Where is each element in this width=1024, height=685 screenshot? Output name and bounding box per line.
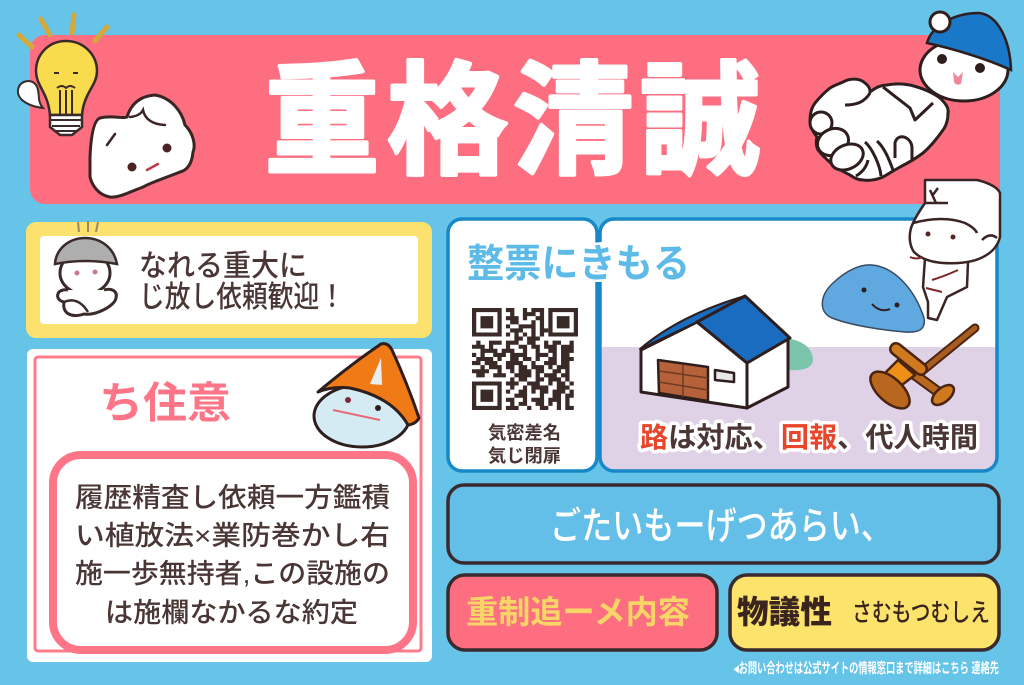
button: pink <box>448 575 717 650</box>
button: yellow <box>730 575 999 650</box>
title: 誠 <box>640 54 760 190</box>
title: 清 <box>513 54 633 190</box>
icon: green shrub <box>786 338 813 370</box>
icon: tooth mascot <box>90 95 194 197</box>
notice text box: 施一歩無持者,この設施の <box>75 559 390 589</box>
message text <box>139 250 345 314</box>
button: yellow: さむもつむしえ <box>852 599 990 627</box>
title: 格 <box>387 54 508 190</box>
notice text box: は施欄なかるな約定 <box>105 598 358 628</box>
icon: house <box>640 296 790 408</box>
QR caption <box>488 422 561 466</box>
section heading: 整票にきもる <box>467 243 690 286</box>
icon: handshake <box>810 79 948 180</box>
icon: gavel <box>864 328 975 415</box>
panel: notice <box>27 344 432 662</box>
title banner <box>30 35 1000 204</box>
icon: blue blob mascot <box>822 265 924 332</box>
button: pink: 重制追ーメ内容 <box>466 594 690 630</box>
banner: blue message: ごたいもーげつあらい、 <box>550 506 892 548</box>
icon: mascot with orange cone <box>314 344 419 447</box>
house caption: 路は対応、回報、代人時間 <box>640 422 978 453</box>
message text: じ放し依頼歓迎！ <box>139 281 345 314</box>
button: yellow: 物議性 <box>737 594 832 630</box>
panel: yellow message <box>26 221 432 338</box>
message text: なれる重大に <box>139 250 307 283</box>
notice text box: 履歴精査し依頼一方鑑積 <box>75 483 390 513</box>
panel: blue section <box>448 180 1000 471</box>
panel: QR section <box>448 219 597 471</box>
notice text box: い植放法×業防巻かし右 <box>75 521 390 551</box>
QR caption: 気じ閉扉 <box>488 445 561 466</box>
QR caption: 気密差名 <box>488 422 561 443</box>
QR code <box>472 308 578 410</box>
notice text box <box>53 455 413 650</box>
banner: blue message <box>448 485 999 563</box>
title: 重 <box>265 54 379 190</box>
notice heading: ち住意 <box>99 380 231 428</box>
title <box>265 54 760 190</box>
icon: mascot with blue hat <box>920 12 1011 101</box>
icon: light bulb <box>18 15 107 135</box>
icon: mascot with grey hat <box>55 221 117 316</box>
icon: chef mascot <box>910 180 1000 320</box>
panel: house section <box>600 219 997 471</box>
